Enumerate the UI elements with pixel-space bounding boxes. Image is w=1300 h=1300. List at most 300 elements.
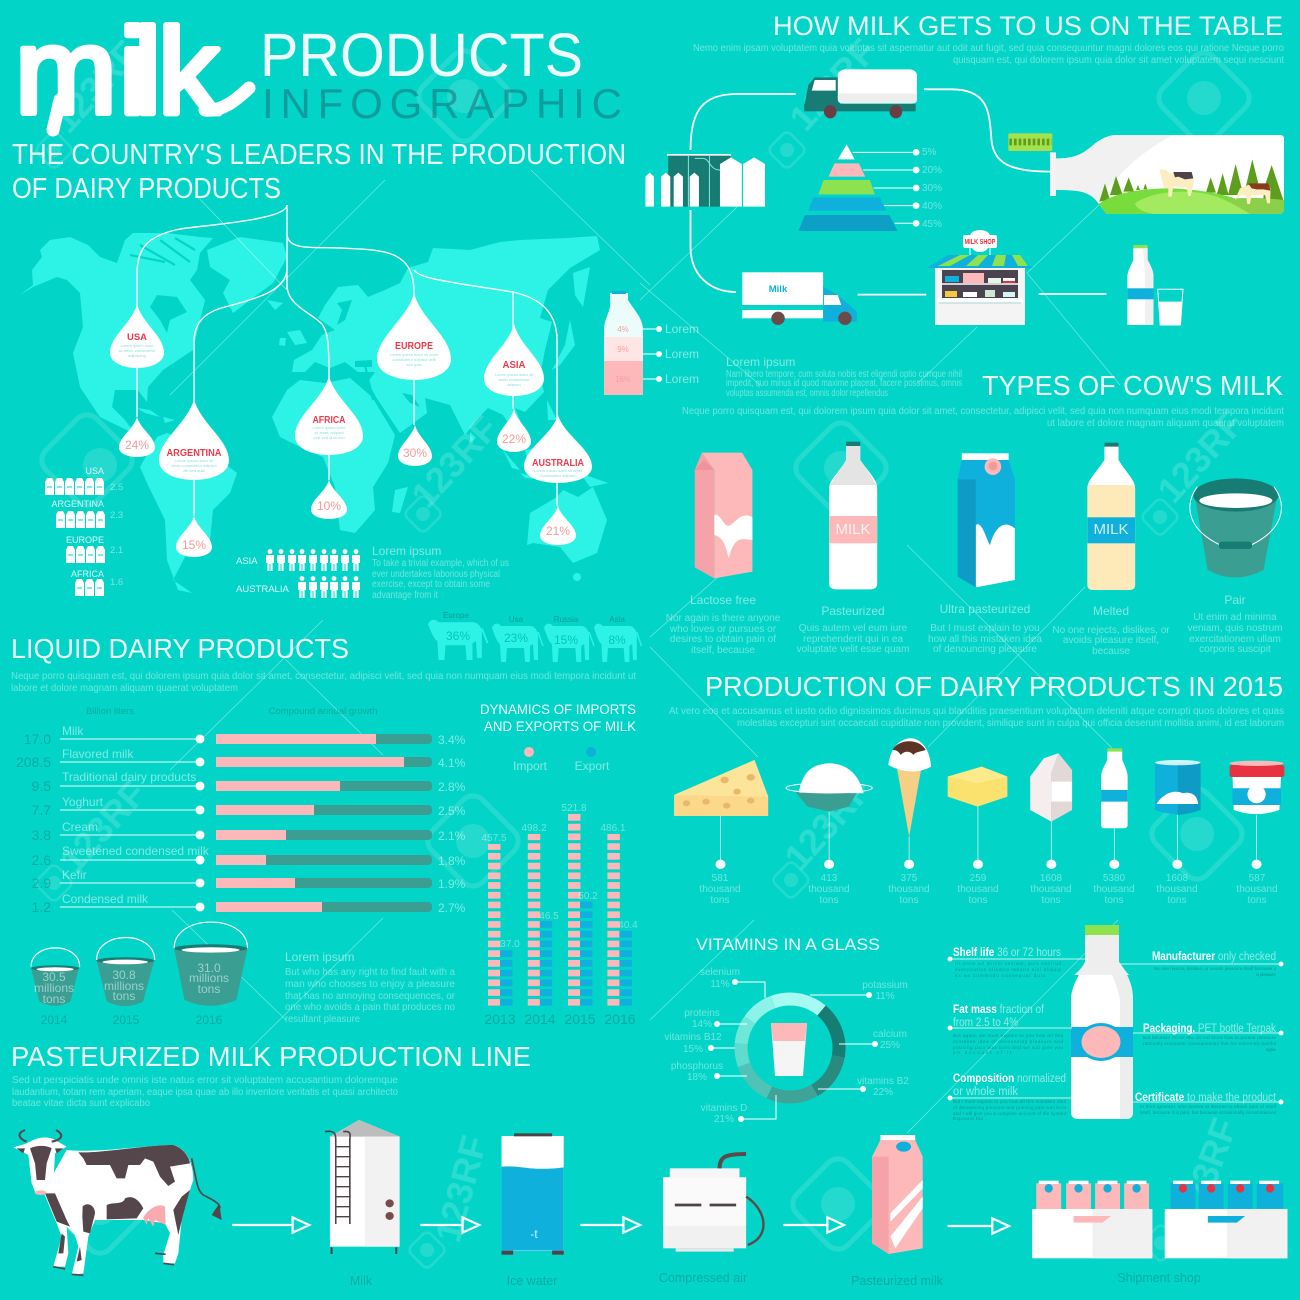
small bottle chart: Lorem xyxy=(665,347,699,361)
icon: ice cream xyxy=(888,738,931,837)
subtext: types of milk: ut labore et dolore magnam aliquam quaerat voluptatem xyxy=(1047,418,1284,429)
icon: blue carton xyxy=(958,453,1015,587)
heading: vitamins: VITAMINS IN A GLASS xyxy=(696,935,880,954)
text block: bucket note: Lorem ipsum xyxy=(285,950,354,964)
heading: production: PRODUCTION OF DAIRY PRODUCTS IN 2015 xyxy=(705,671,1283,702)
vitamin labels: phosphorus xyxy=(671,1061,723,1072)
watermark text: 123RF xyxy=(427,1131,495,1246)
arrows xyxy=(232,1217,1009,1234)
map drop: Argentina xyxy=(159,399,229,557)
pyramid chart: 45% xyxy=(922,219,942,230)
milk type labels: avoids pleasure itself, xyxy=(1063,635,1159,646)
people chart xyxy=(236,549,360,598)
vitamin labels: vitamins B2 xyxy=(857,1076,909,1087)
pyramid chart: 40% xyxy=(922,201,942,212)
heading: leaders: OF DAIRY PRODUCTS xyxy=(12,173,281,205)
map drop: Africa: AFRICA xyxy=(312,415,346,426)
text block: map note: Lorem ipsum xyxy=(372,544,441,558)
bucket chart: tons xyxy=(198,982,220,996)
small bottle chart: Lorem xyxy=(665,372,699,386)
subtext: production: At vero eos et accusamus et iusto odio dignissimos ducimus qui blanditiis praesentium voluptatum deleniti atque corrupti quos dolores et quas xyxy=(669,706,1284,717)
bucket chart: 30.5 xyxy=(42,970,66,984)
world map xyxy=(20,233,608,593)
product values: tons xyxy=(820,895,838,906)
map drop: Australia: Lorem ipsum dolor sit amet xyxy=(534,468,583,473)
growth bar chart: 3.8 xyxy=(32,827,51,843)
icon: bottle and glass xyxy=(1127,245,1183,325)
small bottle chart: Lorem xyxy=(665,322,699,336)
bottle annotations: But again, we must explain to you how all this xyxy=(953,1033,1064,1038)
import export chart: 498.2 xyxy=(521,823,547,834)
product values: thousand xyxy=(1093,884,1135,895)
import export chart: 2013 xyxy=(484,1011,516,1027)
product values: thousand xyxy=(1236,884,1278,895)
text block: map note: ever undertakes laborious physical xyxy=(372,569,500,580)
bottle annotations: Ut enim ad minim veniam, quis nostrud xyxy=(955,961,1061,966)
text block: process note xyxy=(726,355,962,399)
map drop: USA: 24% xyxy=(125,438,149,452)
product values: 259 xyxy=(970,873,987,884)
text block: process note: Nam libero tempore, cum soluta nobis est eligendi optio cumque nihil xyxy=(726,369,962,380)
map drop: Europe: Lorem ipsum dolor sit amet xyxy=(390,352,439,357)
vitamin labels: 21% xyxy=(714,1114,734,1125)
subtext: production: molestias excepturi sint occaecati cupiditate non provident, similique sunt in culpa qui officia deserunt mollitia animi, id est laborum xyxy=(737,718,1284,729)
bottle annotations: Fat mass fraction of xyxy=(953,1004,1045,1016)
bucket chart: millions xyxy=(34,981,74,995)
growth bar chart: 1.9% xyxy=(438,877,466,891)
product values: 581 xyxy=(712,873,729,884)
text block: bucket note: that has no annoying consequences, or xyxy=(285,991,456,1002)
vitamin labels: 14% xyxy=(692,1019,712,1030)
map drop: Africa: 10% xyxy=(317,499,341,513)
vitamin labels: 25% xyxy=(880,1040,900,1051)
vitamin labels: vitamins B12 xyxy=(664,1032,722,1043)
heading: leaders: THE COUNTRY'S LEADERS IN THE PRODUCTION xyxy=(12,139,626,171)
connector lines xyxy=(137,205,557,516)
bottle annotations xyxy=(948,947,1284,1121)
small bottle chart: 4% xyxy=(617,325,629,334)
product values: 1608 xyxy=(1166,873,1189,884)
growth bar chart: Flavored milk xyxy=(62,747,134,761)
heading: products: PRODUCTS xyxy=(260,21,583,89)
bucket chart: 2014 xyxy=(41,1013,68,1027)
product values: tons xyxy=(900,895,918,906)
growth bar chart: 3.4% xyxy=(438,733,466,747)
product values: tons xyxy=(1248,895,1266,906)
growth bar chart: 2.6 xyxy=(32,852,51,868)
cow silhouettes chart: 36% xyxy=(446,629,470,643)
vitamin labels: 11% xyxy=(710,979,730,990)
import export chart: 457.5 xyxy=(481,833,507,844)
icon: ice water tank xyxy=(502,1133,564,1255)
text block: map note: To take a trivial example, which of us xyxy=(372,558,509,569)
supply chain routes xyxy=(691,89,1106,295)
bottle annotations: exercitation ullamco laboris nisi aliquip xyxy=(955,967,1061,972)
label: ice water t: -t xyxy=(530,1227,538,1241)
growth bar chart: 2.8% xyxy=(438,780,466,794)
growth bar chart: 9.5 xyxy=(32,778,51,794)
icon: pail xyxy=(1190,478,1281,577)
production line labels: Milk xyxy=(350,1274,373,1288)
import export chart: 486.1 xyxy=(600,823,626,834)
subtext: production line: laudantium, totam rem aperiam, eaque ipsa quae ab illo inventore veritatis et quasi architecto xyxy=(12,1087,398,1098)
subtext: liquid dairy xyxy=(11,671,636,694)
production products xyxy=(674,738,1284,869)
pyramid chart xyxy=(798,144,942,231)
milk type labels: of denouncing pleasure xyxy=(933,644,1037,655)
subtext: how milk gets: quisquam est, qui dolorem ipsum quia dolor sit amet voluptatem sequi nesciunt xyxy=(953,55,1284,66)
cow silhouettes chart xyxy=(428,611,641,662)
production line illustrations xyxy=(232,1120,1287,1258)
milk type labels: veniam, quis nostrum xyxy=(1187,623,1283,634)
icon: yogurt cup xyxy=(1230,761,1284,814)
milk type labels: Nor again is there anyone xyxy=(666,613,781,624)
small bottle chart: 16% xyxy=(615,375,631,384)
product values: 5380 xyxy=(1103,873,1126,884)
text block: bucket note: But who has any right to find fault with a xyxy=(285,967,455,978)
map drop: Asia xyxy=(484,324,544,452)
production line labels: Shipment shop xyxy=(1117,1271,1201,1285)
watermark text: 123RF xyxy=(51,773,154,881)
small bottle chart: 9% xyxy=(617,345,629,354)
milk type labels: But I must explain to you xyxy=(930,623,1040,634)
milk type labels: Ut enim ad minima xyxy=(1193,612,1277,623)
import export chart: 2014 xyxy=(524,1011,556,1027)
text block: bucket note xyxy=(285,950,456,1025)
growth bar chart: Milk xyxy=(62,724,84,738)
milk type labels: how all this mistaken idea xyxy=(928,634,1042,645)
icon: cottage cheese bowl xyxy=(786,763,872,812)
icon: green cap bottle xyxy=(1101,748,1128,828)
icon: melted milk bottle xyxy=(1087,443,1135,590)
growth bar chart: 1.8% xyxy=(438,854,466,868)
map drop: USA: Lorem ipsum dolor xyxy=(120,343,154,348)
map drop: Asia: 22% xyxy=(502,432,526,446)
bottle annotations: In their ignorant, who pursue or desires to obtain pain of itself xyxy=(1140,1104,1277,1109)
bottle annotations: and I will give you a complete account of the system xyxy=(953,1111,1066,1116)
people chart: ASIA xyxy=(236,556,258,567)
subtext: types of milk xyxy=(682,406,1284,429)
milk type labels xyxy=(666,593,1283,657)
map drop: USA: adipiscing xyxy=(128,353,146,358)
cow silhouettes chart: 15% xyxy=(554,633,578,647)
bottle annotations: an account of it xyxy=(953,1050,1012,1055)
milk type labels: Pair xyxy=(1224,593,1246,607)
cow silhouettes chart: Russia xyxy=(554,615,579,624)
growth bar chart: Yoghurt xyxy=(62,795,104,809)
vitamin labels: 15% xyxy=(683,1044,703,1055)
map drop: Africa xyxy=(295,376,363,519)
map drop: Argentina: ARGENTINA xyxy=(166,448,222,459)
carton legend: 1.6 xyxy=(110,577,123,588)
growth bar chart: 2.1% xyxy=(438,829,466,843)
icon: delivery truck xyxy=(742,272,857,325)
subtext: production xyxy=(669,706,1284,729)
milk type labels: No one rejects, dislikes, or xyxy=(1052,625,1170,636)
legend: import export: Export xyxy=(575,759,610,773)
text block: process note: voluptas assumenda est, omnis dolor repellendus xyxy=(726,388,888,399)
vitamin labels: calcium xyxy=(873,1029,907,1040)
heading: infographic: INFOGRAPHIC xyxy=(262,80,622,127)
map drop: Australia: consectetur adipisci xyxy=(540,473,576,478)
vitamin labels: potassium xyxy=(862,980,908,991)
product values: tons xyxy=(1105,895,1123,906)
logo: milk: milk xyxy=(15,3,220,139)
growth bar chart: 2.9 xyxy=(32,875,51,891)
product values: thousand xyxy=(957,884,999,895)
growth bar chart: Cream xyxy=(62,820,98,834)
heading: dynamics xyxy=(480,701,637,734)
milk type labels: Pasteurized xyxy=(821,604,885,618)
text block: bucket note: resultant pleasure xyxy=(285,1014,360,1025)
cow silhouettes chart: 8% xyxy=(608,633,626,647)
product values: tons xyxy=(969,895,987,906)
bucket chart: 30.8 xyxy=(112,968,136,982)
watermark text: 123RF xyxy=(1170,1113,1245,1229)
bottle annotations: from 2.5 to 4% xyxy=(953,1017,1018,1029)
growth bar chart: Condensed milk xyxy=(62,892,149,906)
product values: 375 xyxy=(901,873,918,884)
map drop: Asia: adipisci xyxy=(507,382,521,387)
map drop: USA: USA xyxy=(127,332,147,343)
milk type labels: Ultra pasteurized xyxy=(940,602,1030,616)
vitamin labels: 18% xyxy=(687,1072,707,1083)
icon: milk shop: MILK SHOP xyxy=(964,237,996,246)
icon: cheese xyxy=(674,760,768,816)
cow silhouettes chart: Asia xyxy=(609,615,625,624)
carton legend: USA xyxy=(85,466,104,476)
map drop: Africa: sit amet, adipisci xyxy=(314,430,344,435)
subtext: production line: beatae vitae dicta sunt explicabo xyxy=(12,1098,150,1109)
map drop: Africa: Lorem ipsum dolor xyxy=(312,425,346,430)
vitamin labels: selenium xyxy=(700,967,740,978)
bottle annotations: Packaging. PET bottle Terpak xyxy=(1143,1023,1276,1035)
watermark text: 123RF xyxy=(403,408,506,516)
import export chart xyxy=(481,803,638,1027)
text block: bucket note: man who chooses to enjoy a pleasure xyxy=(285,979,455,990)
growth bar chart: Traditional dairy products xyxy=(62,770,196,784)
production line labels: Ice water xyxy=(507,1274,557,1288)
bottle annotations: Certificate to make the product xyxy=(1135,1092,1277,1104)
growth bar chart: Sweetened condensed milk xyxy=(62,844,210,858)
product values: thousand xyxy=(888,884,930,895)
watermark text: 123RF xyxy=(1149,403,1252,511)
bottle annotations: Composition normalized xyxy=(953,1073,1066,1085)
growth bar chart xyxy=(16,706,466,915)
growth bar chart: Billion liters xyxy=(86,706,134,717)
import export chart: 2015 xyxy=(564,1011,596,1027)
map drop: Australia: 21% xyxy=(546,524,570,538)
bottle annotations: of denouncing pleasure and praising pain was born xyxy=(953,1105,1066,1110)
map drop: Argentina: Lorem ipsum dolor sit xyxy=(175,458,214,463)
vitamin labels: vitamins D xyxy=(701,1103,747,1114)
carton legend: 2.5 xyxy=(110,482,123,493)
heading: how milk gets: HOW MILK GETS TO US ON THE TABLE xyxy=(773,11,1283,41)
icon: glass of milk xyxy=(771,1023,807,1076)
bucket chart: tons xyxy=(113,989,135,1003)
icon: pasteurized carton xyxy=(872,1135,923,1254)
map drop: Africa: velit sed quia non xyxy=(313,435,345,440)
vitamin labels xyxy=(664,967,909,1125)
product values: 413 xyxy=(821,873,838,884)
growth bar chart: 208.5 xyxy=(16,754,51,770)
bucket chart: 2015 xyxy=(113,1013,140,1027)
import export chart: 50.2 xyxy=(578,891,598,902)
icon: anatomy bottle xyxy=(1071,925,1133,1119)
bottle annotations: ex ea commodo consequat duis xyxy=(955,973,1046,978)
bucket chart: millions xyxy=(104,979,144,993)
carton legend xyxy=(45,466,123,596)
subtext: production line: Sed ut perspiciatis unde omnis iste natus error sit voluptatem accusantium doloremque xyxy=(12,1075,398,1086)
heading: production line: PASTEURIZED MILK PRODUCTION LINE xyxy=(11,1041,531,1072)
map drop: Australia: AUSTRALIA xyxy=(532,457,584,469)
bottle annotations: rationally encounter consequences that are extremely painful xyxy=(1143,1041,1276,1046)
milk type labels: Lactose free xyxy=(690,593,756,607)
product values: thousand xyxy=(1030,884,1072,895)
milk type labels: Quis autem vel eum iure xyxy=(799,623,908,634)
text block: bucket note: one who avoids a pain that produces no xyxy=(285,1002,455,1013)
watermark text: 123RF xyxy=(781,31,884,139)
product values: thousand xyxy=(699,884,741,895)
subtext: production line xyxy=(12,1075,398,1109)
import export chart: 37.0 xyxy=(500,939,520,950)
bucket chart: 31.0 xyxy=(197,961,221,975)
people chart: AUSTRALIA xyxy=(236,584,289,595)
product values: tons xyxy=(1168,895,1186,906)
icon: silo xyxy=(325,1120,400,1254)
growth bar chart: 7.7 xyxy=(32,802,51,818)
icon: pink carton xyxy=(695,453,752,578)
milk type labels: voluptate velit esse quam xyxy=(797,644,909,655)
bottle annotations: Shelf life 36 or 72 hours xyxy=(953,947,1061,959)
import export chart: 521.8 xyxy=(561,803,587,814)
growth bar chart: 4.1% xyxy=(438,756,466,770)
carton legend: 2.1 xyxy=(110,545,123,556)
watermark text: 123RF xyxy=(44,33,147,141)
growth bar chart: Compound annual growth xyxy=(269,706,377,717)
map drop: Argentina: elit sed quia xyxy=(183,468,205,473)
product values: thousand xyxy=(1156,884,1198,895)
heading: dynamics: AND EXPORTS OF MILK xyxy=(484,718,637,734)
product values xyxy=(699,873,1278,906)
small bottle chart xyxy=(604,291,699,395)
bottle annotations: itself, because it is pain, but because occasionally circumstances xyxy=(1140,1110,1277,1115)
milk type labels: Melted xyxy=(1093,604,1129,618)
import export chart: 46.5 xyxy=(539,911,559,922)
production line labels: Pasteurized milk xyxy=(851,1274,944,1288)
bucket chart: 2016 xyxy=(196,1013,223,1027)
label: bottle milk: MILK xyxy=(835,521,871,538)
map drop: Europe: 30% xyxy=(403,446,427,460)
milk type labels: exercitationem ullam xyxy=(1189,634,1281,645)
text block: process note: impedit, quo minus id quod maxime placeat, facere possimus, omnis xyxy=(726,378,962,389)
heading: dynamics: DYNAMICS OF IMPORTS xyxy=(480,701,636,717)
bucket chart: tons xyxy=(43,992,65,1006)
watermark lines xyxy=(170,170,1120,1133)
growth bar chart: 2.7% xyxy=(438,901,466,915)
label: melted bottle milk: MILK xyxy=(1093,521,1129,538)
text block: process note: Lorem ipsum xyxy=(726,355,795,369)
icon: bottle with pasture xyxy=(1008,133,1284,214)
bucket chart xyxy=(31,922,248,1027)
bottle annotations: mistaken idea of denouncing pleasure and xyxy=(953,1039,1063,1044)
product values: tons xyxy=(1042,895,1060,906)
icon: air compressor xyxy=(663,1154,763,1252)
milk type labels: desires to obtain pain of xyxy=(670,634,776,645)
map drop: USA xyxy=(110,304,164,457)
text block: map note: advantage from it xyxy=(372,590,438,601)
import export chart: 2016 xyxy=(604,1011,636,1027)
bottle annotations: is pleasure xyxy=(1256,972,1276,977)
icon: milk shop xyxy=(927,230,1033,325)
map drop: USA: sit amet, consectetur xyxy=(119,348,156,353)
map drop: Europe: EUROPE xyxy=(395,340,433,352)
heading: types of milk: TYPES OF COW'S MILK xyxy=(982,370,1283,401)
carton legend: ARGENTINA xyxy=(51,499,104,509)
milk type labels: who loves or pursues or xyxy=(669,624,777,635)
bottle annotations: praising pain was born and we will give you xyxy=(953,1045,1063,1050)
subtext: liquid dairy: Neque porro quisquam est, qui dolorem ipsum quia dolor sit amet, consectetur, adipisci velit, sed quia non numquam eius modi tempora incidunt ut xyxy=(11,671,636,682)
map drop: Argentina: amet consectetur adipisci xyxy=(171,463,217,468)
legend: import export xyxy=(513,747,610,773)
bottle annotations: or whole milk xyxy=(953,1086,1018,1098)
growth bar chart: Kefir xyxy=(62,868,87,882)
icon: butter xyxy=(948,767,1007,807)
text block: map note xyxy=(372,544,509,601)
pyramid chart: 5% xyxy=(922,147,937,158)
vitamin labels: proteins xyxy=(684,1008,720,1019)
production line labels xyxy=(350,1271,1201,1288)
map drop: Asia: amet consectetur xyxy=(499,377,530,382)
import export chart: 40.4 xyxy=(618,920,638,931)
icon: small carton xyxy=(1030,753,1072,822)
donut chart xyxy=(741,999,839,1097)
cow silhouettes chart: Usa xyxy=(509,615,524,624)
growth bar chart: 1.2 xyxy=(32,899,51,915)
bottle annotations: Manufacturer only checked xyxy=(1152,951,1276,963)
map drop: Australia xyxy=(524,415,592,545)
carton legend: EUROPE xyxy=(66,535,104,545)
map drop: Asia: ASIA xyxy=(502,360,526,371)
icon: tanker truck xyxy=(804,69,917,118)
vitamin labels: 11% xyxy=(875,991,895,1002)
map drop: Europe: sed quia xyxy=(406,362,422,367)
product stems xyxy=(720,807,1257,864)
subtext: how milk gets xyxy=(693,43,1284,66)
icon: shipment crates xyxy=(1032,1181,1287,1258)
product dots xyxy=(716,860,1262,869)
bottle annotations: But because those who do not know how to pursue pleasure xyxy=(1143,1035,1276,1040)
bucket chart: millions xyxy=(189,971,229,985)
milk type labels: corporis suscipit xyxy=(1199,644,1271,655)
icon: cow xyxy=(13,1130,222,1275)
growth bar chart: 2.5% xyxy=(438,804,466,818)
legend: import export: Import xyxy=(513,759,548,773)
icon: storage tanks xyxy=(645,154,765,207)
product values: 1608 xyxy=(1040,873,1063,884)
text block: map note: exercise, except to obtain some xyxy=(372,579,490,590)
map drop: Europe: consectetur adipisci velit xyxy=(392,357,437,362)
cow silhouettes chart: Europe xyxy=(443,611,469,620)
vitamin labels: 22% xyxy=(873,1087,893,1098)
icon: blue can xyxy=(1155,760,1201,815)
watermark text: 123RF xyxy=(776,770,879,878)
map drop: Europe xyxy=(377,293,451,466)
product values: 587 xyxy=(1249,873,1266,884)
product values: tons xyxy=(711,895,729,906)
milk type labels: itself, because xyxy=(691,645,755,656)
map drop: Argentina: 15% xyxy=(182,538,206,552)
